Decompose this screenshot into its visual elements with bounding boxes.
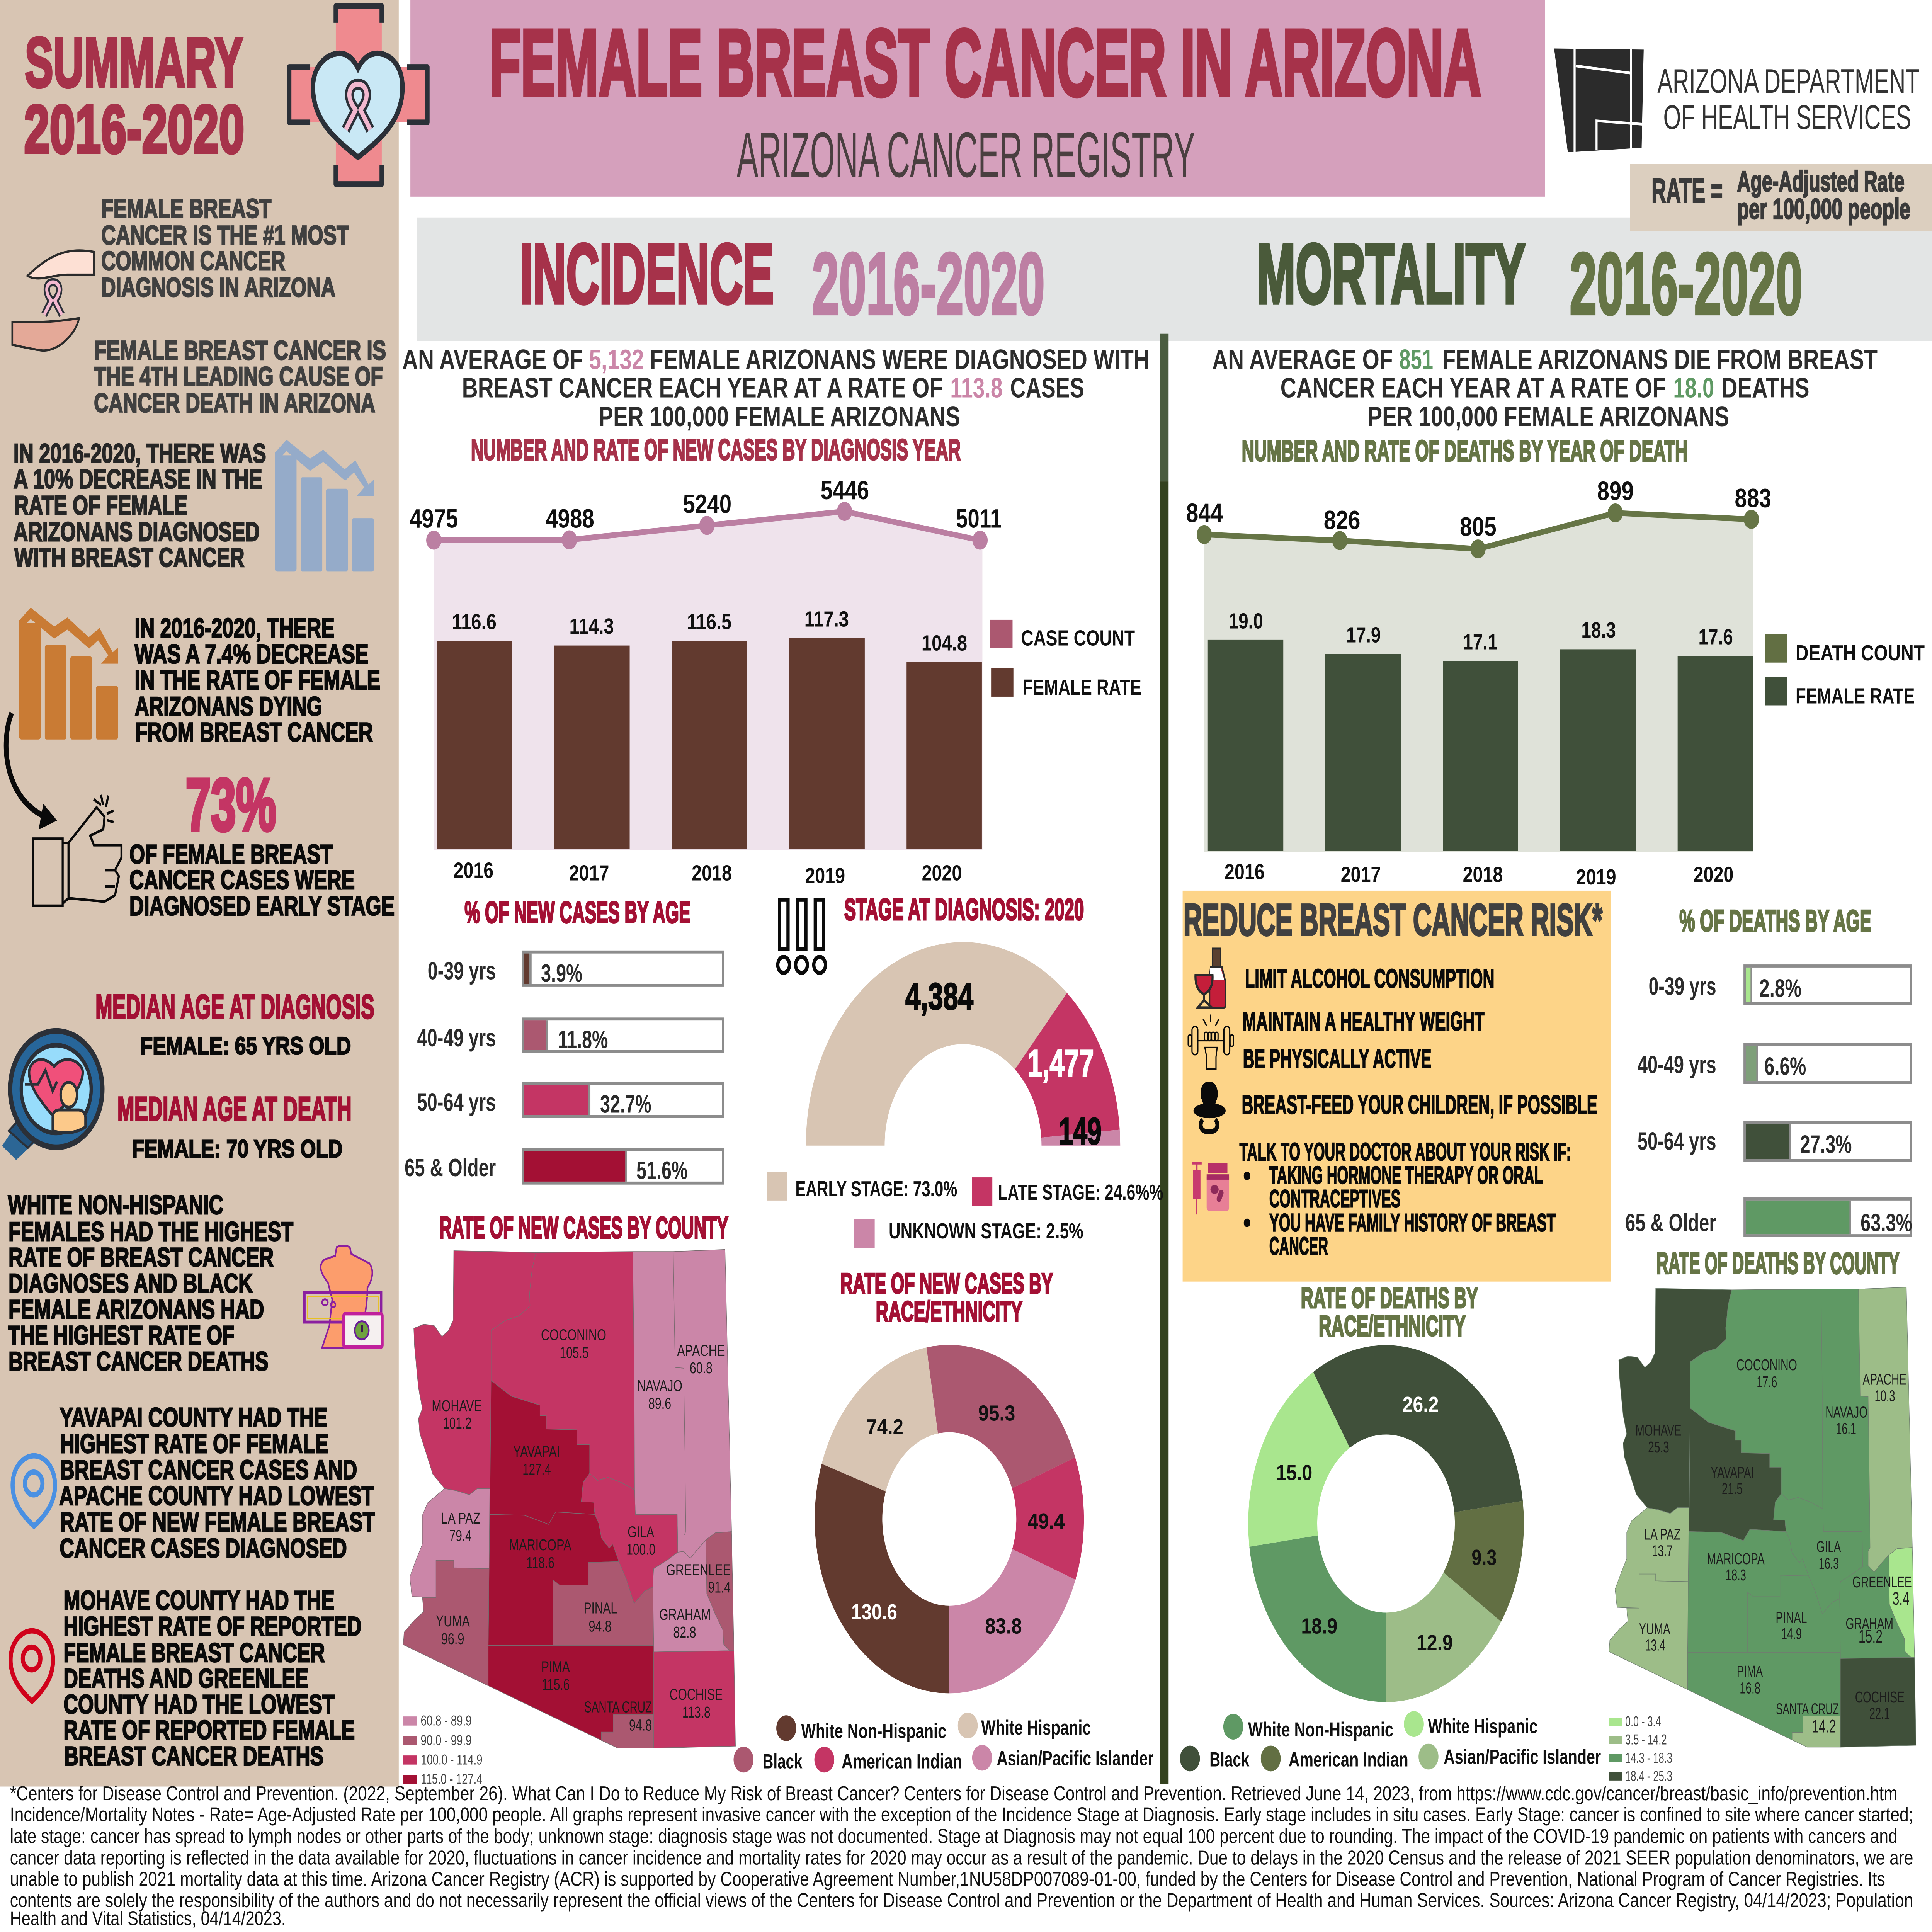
map: rate of deaths by county: GRAHAM	[1846, 1615, 1893, 1633]
text: 10 percent decrease: IN 2016-2020, THERE WAS	[14, 439, 266, 469]
text: most common cancer: DIAGNOSIS IN ARIZONA	[101, 273, 335, 303]
chart: incidence count and rate: 5240	[683, 489, 731, 519]
map: rate of new cases by county: COCONINO	[541, 1326, 606, 1344]
rate definition box: RATE =	[1651, 172, 1723, 211]
logo: Arizona Department of Health Services	[1554, 46, 1919, 155]
map legend: 14.3 - 18.3	[1625, 1750, 1672, 1766]
text: early stage: CANCER CASES WERE	[129, 865, 355, 895]
text: mortality summary: DEATHS	[1722, 372, 1810, 403]
text: mortality summary: 18.0	[1673, 372, 1714, 403]
chart: new cases by race and ethnicity donut: 130.6	[851, 1600, 897, 1624]
icon: blue declining bars	[275, 440, 374, 571]
icon: thumbs up	[33, 795, 121, 906]
chart: new cases by race and ethnicity donut	[733, 1268, 1154, 1773]
legend: incidence chart	[990, 620, 1141, 699]
sidebar title: 2016-2020	[24, 91, 245, 167]
map: rate of deaths by county: SANTA CRUZ	[1776, 1700, 1839, 1718]
map: rate of new cases by county: 100.0	[626, 1541, 655, 1558]
map: rate of deaths by county: COCONINO	[1736, 1356, 1797, 1374]
heading: incidence: INCIDENCE	[520, 226, 774, 321]
text: county incidence finding: CANCER CASES DIAGNOSED	[60, 1534, 347, 1563]
chart: incidence count and rate: 4988	[546, 503, 594, 533]
text: county incidence finding: YAVAPAI COUNTY HAD THE	[60, 1403, 327, 1433]
chart: incidence count and rate: 5446	[820, 475, 869, 505]
map: rate of new cases by county	[403, 1211, 735, 1787]
chart: percent of new cases by age: 50-64 yrs	[417, 1088, 496, 1116]
map: rate of new cases by county: GILA	[628, 1523, 655, 1541]
text: limit alcohol: LIMIT ALCOHOL CONSUMPTION	[1245, 963, 1494, 993]
text: race and ethnicity finding: FEMALES HAD THE HIGHEST	[9, 1217, 293, 1247]
legend: mortality chart: DEATH COUNT	[1796, 640, 1925, 665]
heading: % OF NEW CASES BY AGE	[464, 896, 690, 929]
legend: mortality chart	[1765, 634, 1925, 708]
text: 7.4 percent decrease: FROM BREAST CANCER	[135, 718, 373, 747]
text: 7.4 percent decrease: IN THE RATE OF FEMALE	[134, 665, 380, 695]
legend: Black	[762, 1750, 803, 1773]
text: fourth leading cause: CANCER DEATH IN ARIZONA	[94, 388, 375, 418]
map legend: 3.5 - 14.2	[1625, 1732, 1667, 1748]
text: most common cancer	[101, 194, 349, 303]
map: rate of new cases by county: 82.8	[673, 1623, 696, 1641]
map: rate of new cases by county: 101.2	[443, 1414, 471, 1432]
heading: % OF DEATHS BY AGE	[1679, 904, 1871, 938]
text: race and ethnicity finding: THE HIGHEST RATE OF	[8, 1321, 235, 1350]
chart: mortality count and rate: 2018	[1463, 862, 1503, 887]
map: rate of deaths by county: NAVAJO	[1825, 1403, 1867, 1421]
legend: Asian/Pacific Islander	[1444, 1746, 1601, 1769]
chart: stage at diagnosis half donut	[806, 893, 1120, 1153]
chart: deaths by race and ethnicity donut: 12.9	[1417, 1630, 1453, 1655]
legend	[1180, 1711, 1601, 1771]
map: rate of new cases by county: 105.5	[560, 1344, 588, 1362]
chart: percent of deaths by age: 40-49 yrs	[1638, 1051, 1716, 1079]
map legend: 115.0 - 127.4	[421, 1771, 482, 1787]
chart: deaths by race and ethnicity donut: 15.0	[1276, 1460, 1312, 1485]
map: rate of new cases by county: 113.8	[682, 1703, 711, 1721]
chart: mortality count and rate: 2020	[1694, 862, 1733, 887]
text: early stage: DIAGNOSED EARLY STAGE	[129, 891, 395, 921]
subtitle: ARIZONA CANCER REGISTRY	[737, 119, 1195, 191]
rate definition box	[1630, 164, 1932, 231]
text: healthy weight and active	[1243, 1006, 1485, 1073]
text: breast-feed: BREAST-FEED YOUR CHILDREN, IF POSSIBLE	[1242, 1090, 1597, 1119]
heading	[1301, 1282, 1478, 1342]
text: county incidence finding	[59, 1403, 375, 1563]
text: county mortality finding: MOHAVE COUNTY HAD THE	[63, 1586, 335, 1616]
legend: stage: EARLY STAGE: 73.0%	[795, 1177, 957, 1201]
text: fourth leading cause: FEMALE BREAST CANCER IS	[94, 336, 386, 366]
map: rate of new cases by county: 115.6	[542, 1676, 570, 1693]
icon: blue map pin	[13, 1456, 55, 1526]
text: talk to your doctor	[1240, 1138, 1571, 1260]
heading: incidence years: 2016-2020	[812, 235, 1045, 333]
map: rate of deaths by county: GILA	[1816, 1538, 1841, 1556]
map: rate of new cases by county: YAVAPAI	[513, 1443, 560, 1461]
text: 10 percent decrease	[14, 439, 266, 573]
icon: magnifier with heart and person	[2, 1028, 104, 1160]
map: rate of deaths by county: COCHISE	[1855, 1688, 1905, 1706]
text: talk to your doctor: TALK TO YOUR DOCTOR ABOUT YOUR RISK IF:	[1240, 1138, 1571, 1166]
legend: White Non-Hispanic	[801, 1720, 946, 1743]
text: county mortality finding: HIGHEST RATE OF REPORTED	[63, 1612, 362, 1641]
text: race and ethnicity finding	[8, 1190, 293, 1377]
text: mortality summary: 851	[1399, 344, 1433, 375]
map: rate of new cases by county: NAVAJO	[637, 1377, 682, 1395]
map: rate of new cases by county: 127.4	[522, 1461, 551, 1478]
center divider	[1160, 334, 1168, 1784]
map: rate of deaths by county	[1609, 1247, 1916, 1784]
legend: stage	[767, 1172, 1163, 1248]
chart: new cases by race and ethnicity donut: 49.4	[1028, 1509, 1065, 1533]
header banner	[410, 0, 1545, 197]
chart: percent of deaths by age: 63.3%	[1861, 1209, 1912, 1237]
text: 7.4 percent decrease: ARIZONANS DYING	[134, 692, 322, 722]
legend: incidence chart: CASE COUNT	[1021, 626, 1135, 650]
footer: citations and notes: late stage: cancer has spread to lymph nodes or other parts of the body; unknown stage: diagnosis stage was not documented. Stage at Diagnosis may not equal 100 percent due to rounding. The impact of the COVID-19 pandemic on patients with cancers and	[10, 1825, 1898, 1847]
chart: deaths by race and ethnicity donut: 26.2	[1403, 1392, 1439, 1417]
text: 10 percent decrease: A 10% DECREASE IN THE	[14, 464, 262, 494]
map legend: 100.0 - 114.9	[421, 1752, 482, 1768]
chart: mortality count and rate: 19.0	[1229, 609, 1263, 633]
text: early stage: OF FEMALE BREAST	[129, 840, 333, 869]
map: rate of new cases by county: 60.8	[690, 1359, 713, 1377]
map: rate of deaths by county: 15.2	[1859, 1626, 1883, 1646]
chart: incidence count and rate: 4975	[410, 503, 458, 533]
heading: RACE/ETHNICITY	[876, 1296, 1022, 1328]
icon: hands holding ribbon	[12, 250, 94, 350]
chart: mortality count and rate: 883	[1735, 483, 1771, 513]
map: rate of deaths by county: YUMA	[1639, 1620, 1670, 1638]
text: incidence summary: FEMALE ARIZONANS WERE DIAGNOSED WITH	[650, 344, 1150, 375]
text: median age at diagnosis: MEDIAN AGE AT DIAGNOSIS	[95, 988, 374, 1026]
map: rate of deaths by county: 17.6	[1757, 1373, 1777, 1391]
chart: percent of deaths by age: 50-64 yrs	[1638, 1128, 1716, 1155]
chart: percent of deaths by age	[1625, 904, 1912, 1237]
footer: citations and notes: contents are solely the responsibility of the authors and do not necessarily represent the official views of the Centers for Disease Control and Prevention or the Department of Health and Human Services. Sources: Arizona Cancer Registry, 04/14/2023; Population	[10, 1889, 1913, 1911]
map: rate of new cases by county: PIMA	[541, 1658, 570, 1675]
chart: incidence count and rate: 116.5	[687, 609, 731, 634]
legend: White Non-Hispanic	[1248, 1718, 1393, 1741]
chart: percent of deaths by age: 2.8%	[1759, 975, 1801, 1002]
chart: mortality count and rate: 2017	[1341, 862, 1381, 887]
legend	[733, 1713, 1154, 1773]
chart: percent of deaths by age: 65 & Older	[1625, 1209, 1716, 1237]
text: talk to your doctor: CONTRACEPTIVES	[1269, 1185, 1400, 1213]
text: incidence summary: BREAST CANCER EACH YEAR AT A RATE OF	[462, 372, 943, 403]
text: 10 percent decrease: ARIZONANS DIAGNOSED	[14, 517, 260, 547]
panel: reduce breast cancer risk	[1183, 891, 1611, 1282]
text: county incidence finding: APACHE COUNTY HAD LOWEST	[59, 1481, 374, 1511]
map legend	[1609, 1714, 1672, 1784]
text: mortality summary: CANCER EACH YEAR AT A RATE OF	[1281, 372, 1666, 403]
text: mortality summary	[1212, 344, 1878, 432]
arrow: curved to thumbs up	[6, 713, 57, 830]
chart: mortality count and rate: 2016	[1225, 859, 1265, 884]
map: rate of new cases by county: 96.9	[441, 1630, 464, 1648]
map: rate of new cases by county: MOHAVE	[432, 1397, 482, 1415]
text: incidence summary: PER 100,000 FEMALE ARIZONANS	[599, 401, 960, 432]
logo: Arizona Department of Health Services: ARIZONA DEPARTMENT	[1657, 62, 1919, 100]
text: incidence summary: 113.8	[950, 372, 1003, 403]
text: median age at diagnosis	[95, 988, 374, 1060]
stat: 73 percent: 73%	[185, 764, 276, 846]
text: fourth leading cause	[94, 336, 386, 418]
map: rate of new cases by county: APACHE	[677, 1342, 725, 1359]
legend: stage: UNKNOWN STAGE: 2.5%	[889, 1218, 1083, 1243]
map: rate of deaths by county: 16.1	[1836, 1420, 1856, 1437]
map: rate of new cases by county: 89.6	[648, 1395, 671, 1412]
chart: percent of new cases by age: 3.9%	[541, 960, 582, 988]
text: most common cancer: FEMALE BREAST	[101, 194, 271, 224]
chart: percent of new cases by age: 0-39 yrs	[428, 957, 496, 985]
chart: mortality count and rate: 17.1	[1463, 629, 1498, 654]
chart: incidence count and rate: 2018	[692, 861, 732, 885]
chart: incidence count and rate: 117.3	[804, 607, 849, 631]
chart: percent of deaths by age: 6.6%	[1764, 1053, 1806, 1080]
map legend: 90.0 - 99.9	[421, 1733, 471, 1749]
icon: three exclamation marks	[778, 900, 825, 973]
text: county incidence finding: HIGHEST RATE OF FEMALE	[60, 1429, 328, 1459]
legend: Black	[1209, 1748, 1250, 1771]
heading: RATE OF NEW CASES BY	[840, 1268, 1053, 1300]
chart: stage at diagnosis half donut: 1,477	[1027, 1042, 1094, 1085]
chart: percent of new cases by age	[405, 896, 723, 1185]
sidebar title	[24, 23, 245, 167]
map: rate of deaths by county: 13.4	[1645, 1636, 1665, 1654]
chart: incidence count and rate: 104.8	[922, 631, 967, 655]
section band: incidence and mortality headings	[417, 218, 1932, 341]
chart: new cases by race and ethnicity donut: 74.2	[866, 1414, 903, 1439]
map: rate of deaths by county: APACHE	[1862, 1370, 1906, 1388]
text: most common cancer: COMMON CANCER	[101, 246, 286, 276]
map: rate of deaths by county: 18.3	[1726, 1566, 1746, 1584]
chart: mortality count and rate: 826	[1324, 505, 1360, 535]
map: rate of deaths by county: GREENLEE	[1852, 1573, 1912, 1591]
icon: medical cross with heart ribbon	[287, 3, 429, 187]
heading: STAGE AT DIAGNOSIS: 2020	[844, 893, 1084, 926]
legend: White Hispanic	[1428, 1715, 1538, 1738]
map: rate of new cases by county: GRAHAM	[659, 1605, 711, 1623]
text: county mortality finding: RATE OF REPORTED FEMALE	[63, 1715, 355, 1745]
heading: REDUCE BREAST CANCER RISK*	[1184, 895, 1602, 945]
map: rate of new cases by county: 91.4	[708, 1578, 731, 1596]
map: rate of new cases by county: SANTA CRUZ	[584, 1698, 652, 1716]
text: county mortality finding: BREAST CANCER DEATHS	[64, 1742, 323, 1771]
text: 7.4 percent decrease: WAS A 7.4% DECREASE	[134, 639, 369, 669]
map: rate of deaths by county: 16.3	[1819, 1554, 1839, 1572]
panel: summary sidebar	[0, 0, 429, 1787]
icon: pacifier	[1194, 1082, 1226, 1132]
rate definition box: per 100,000 people	[1737, 193, 1910, 225]
heading: deaths by year: NUMBER AND RATE OF DEATHS BY YEAR OF DEATH	[1242, 435, 1687, 468]
map: rate of new cases by county: GREENLEE	[666, 1561, 731, 1578]
chart: percent of new cases by age: 51.6%	[636, 1157, 688, 1185]
map: rate of new cases by county: MARICOPA	[509, 1536, 571, 1554]
rate definition box: Age-Adjusted Rate	[1737, 165, 1905, 197]
sidebar title: SUMMARY	[25, 23, 243, 102]
chart: percent of new cases by age: 11.8%	[558, 1026, 608, 1054]
chart: incidence count and rate: 2019	[805, 863, 845, 888]
chart: mortality count and rate: 17.9	[1346, 622, 1381, 647]
text: race and ethnicity finding: BREAST CANCER DEATHS	[9, 1347, 269, 1377]
chart: mortality count and rate: 17.6	[1698, 624, 1733, 649]
map: rate of deaths by county: PIMA	[1737, 1662, 1763, 1680]
text: county incidence finding: BREAST CANCER CASES AND	[60, 1455, 357, 1485]
legend: White Hispanic	[981, 1716, 1091, 1740]
heading: RACE/ETHNICITY	[1319, 1310, 1466, 1342]
footer: citations and notes: cancer data reporting is reflected in the data available for 2020, fluctuations in cancer incidence and mortality rates for 2020 may occur as a result of the pandemic. Due to delays in the 2020 Census and the release of 2021 SEER population denominators, we are	[10, 1846, 1913, 1869]
text: race and ethnicity finding: RATE OF BREAST CANCER	[9, 1243, 274, 1272]
chart: incidence count and rate: 2020	[922, 861, 962, 885]
map: rate of deaths by county: YAVAPAI	[1711, 1464, 1754, 1481]
chart: mortality count and rate	[1186, 476, 1771, 889]
text: talk to your doctor: YOU HAVE FAMILY HISTORY OF BREAST	[1269, 1209, 1556, 1237]
chart: mortality count and rate: 2019	[1576, 865, 1616, 889]
heading: new cases by year: NUMBER AND RATE OF NEW CASES BY DIAGNOSIS YEAR	[471, 434, 961, 466]
map: rate of deaths by county: 3.4	[1893, 1588, 1910, 1609]
map: rate of deaths by county: 13.7	[1652, 1542, 1673, 1560]
text: median age at death	[117, 1090, 352, 1163]
text: county mortality finding: DEATHS AND GREENLEE	[63, 1664, 308, 1694]
map: rate of deaths by county: MOHAVE	[1636, 1422, 1682, 1439]
chart: mortality count and rate: 805	[1460, 512, 1497, 541]
legend: incidence chart: FEMALE RATE	[1022, 675, 1141, 699]
text: mortality summary: PER 100,000 FEMALE ARIZONANS	[1367, 401, 1729, 432]
text: county mortality finding: FEMALE BREAST CANCER	[63, 1638, 325, 1668]
chart: deaths by race and ethnicity donut: 18.9	[1301, 1614, 1337, 1638]
map legend: 60.8 - 89.9	[421, 1713, 471, 1729]
text: most common cancer: CANCER IS THE #1 MOST	[101, 221, 349, 250]
text: incidence summary	[402, 344, 1150, 432]
map legend: 0.0 - 3.4	[1625, 1714, 1661, 1730]
chart: mortality count and rate: 844	[1186, 498, 1223, 528]
chart: percent of new cases by age: 32.7%	[600, 1090, 651, 1118]
map: rate of deaths by county: 10.3	[1875, 1387, 1895, 1405]
text: fourth leading cause: THE 4TH LEADING CAUSE OF	[94, 362, 383, 392]
chart: mortality count and rate: 899	[1597, 476, 1634, 506]
text: mortality summary: AN AVERAGE OF	[1212, 344, 1393, 375]
chart: percent of deaths by age: 0-39 yrs	[1649, 973, 1716, 1000]
icon: wine bottle and glass	[1196, 949, 1225, 1008]
text: 7.4 percent decrease: IN 2016-2020, THERE	[134, 613, 335, 643]
chart: incidence count and rate: 2016	[453, 858, 493, 883]
legend: American Indian	[842, 1750, 962, 1773]
chart: incidence count and rate	[410, 475, 1002, 888]
icon: mannequin with breast scan	[304, 1246, 382, 1348]
icon: syringe and pill bottle	[1192, 1163, 1229, 1214]
text: county incidence finding: RATE OF NEW FEMALE BREAST	[60, 1507, 375, 1537]
text: incidence summary: 5,132	[589, 344, 644, 375]
map: rate of deaths by county: 14.9	[1781, 1625, 1802, 1643]
text: race and ethnicity finding: FEMALE ARIZONANS HAD	[9, 1295, 264, 1325]
chart: incidence count and rate: 114.3	[569, 614, 614, 639]
legend: Asian/Pacific Islander	[997, 1747, 1154, 1770]
map legend: 18.4 - 25.3	[1625, 1768, 1672, 1784]
chart: deaths by race and ethnicity donut	[1180, 1282, 1601, 1771]
map: rate of new cases by county: 94.8	[629, 1716, 652, 1734]
map: rate of deaths by county: 21.5	[1722, 1480, 1743, 1498]
map legend	[403, 1713, 482, 1787]
text: median age at diagnosis: FEMALE: 65 YRS OLD	[141, 1032, 351, 1060]
map: rate of new cases by county: YUMA	[436, 1612, 470, 1630]
map: rate of deaths by county: 14.2	[1812, 1716, 1836, 1736]
chart: percent of new cases by age: 40-49 yrs	[417, 1024, 496, 1052]
chart: incidence count and rate: 116.6	[452, 609, 497, 634]
text: healthy weight and active: MAINTAIN A HEALTHY WEIGHT	[1243, 1006, 1485, 1036]
map: rate of new cases by county: PINAL	[584, 1599, 617, 1617]
heading	[840, 1268, 1053, 1328]
chart: incidence count and rate: 2017	[569, 861, 609, 885]
heading: RATE OF DEATHS BY	[1301, 1282, 1478, 1314]
legend: mortality chart: FEMALE RATE	[1796, 684, 1915, 708]
footer: citations and notes: unable to publish 2021 mortality data at this time. Arizona Cancer Registry (ACR) is supported by Cooperative Agreement Number,1NU58DP007089-01-00, funded by the Centers for Disease Control and Prevention, National Program of Cancer Registries. Its	[10, 1867, 1885, 1890]
footer: citations and notes: Incidence/Mortality Notes - Rate= Age-Adjusted Rate per 100,000 people. All graphs represent invasive cancer with the exception of the Incidence Stage at Diagnosis. Early stage includes in situ cases. Early Stage: cancer is confined to site where cancer started;	[10, 1803, 1913, 1826]
map: rate of deaths by county: 25.3	[1648, 1438, 1669, 1456]
text: race and ethnicity finding: DIAGNOSES AND BLACK	[9, 1269, 253, 1299]
chart: mortality count and rate: 18.3	[1581, 618, 1616, 642]
map: rate of deaths by county: LA PAZ	[1644, 1525, 1680, 1543]
text: healthy weight and active: BE PHYSICALLY ACTIVE	[1243, 1044, 1432, 1073]
text: county mortality finding: COUNTY HAD THE LOWEST	[63, 1690, 335, 1719]
text: talk to your doctor: TAKING HORMONE THERAPY OR ORAL	[1269, 1162, 1543, 1189]
map: rate of new cases by county: LA PAZ	[441, 1509, 480, 1527]
chart: stage at diagnosis half donut: 149	[1059, 1110, 1102, 1153]
map: rate of deaths by county: MARICOPA	[1707, 1550, 1765, 1568]
footer: citations and notes: Health and Vital Statistics, 04/14/2023.	[10, 1907, 286, 1930]
map: rate of deaths by county: 16.8	[1740, 1679, 1760, 1697]
text: 10 percent decrease: RATE OF FEMALE	[14, 491, 188, 520]
map: rate of new cases by county: 118.6	[526, 1554, 554, 1571]
map: rate of new cases by county: 79.4	[449, 1527, 471, 1544]
chart: new cases by race and ethnicity donut: 95.3	[978, 1401, 1015, 1425]
text: incidence summary: AN AVERAGE OF	[402, 344, 583, 375]
icon: red map pin	[10, 1631, 53, 1701]
chart: deaths by race and ethnicity donut: 9.3	[1471, 1545, 1497, 1570]
map: rate of deaths by county: 22.1	[1869, 1704, 1890, 1722]
text: 7.4 percent decrease	[134, 613, 380, 747]
map: rate of deaths by county: PINAL	[1776, 1609, 1807, 1626]
chart: incidence count and rate: 5011	[956, 503, 1002, 533]
chart: stage at diagnosis half donut: 4,384	[905, 975, 973, 1018]
footer: citations and notes: *Centers for Disease Control and Prevention. (2022, September 26). What Can I Do to Reduce My Risk of Breast Cancer? Centers for Disease Control and Prevention. Retrieved June 14, 2023, from https://www.cdc.gov/cancer/breast/basic_info/prevention.htm	[10, 1782, 1898, 1804]
chart: new cases by race and ethnicity donut: 83.8	[985, 1614, 1022, 1638]
text: median age at death: FEMALE: 70 YRS OLD	[132, 1135, 342, 1163]
heading: mortality years: 2016-2020	[1570, 235, 1803, 333]
text: incidence summary: CASES	[1010, 372, 1084, 403]
chart: percent of deaths by age: 27.3%	[1800, 1131, 1852, 1158]
main title: FEMALE BREAST CANCER IN ARIZONA	[489, 10, 1481, 116]
icon: dumbbell in hand	[1188, 1014, 1233, 1069]
chart: percent of new cases by age: 65 & Older	[405, 1154, 496, 1182]
text: race and ethnicity finding: WHITE NON-HISPANIC	[8, 1190, 223, 1220]
legend: American Indian	[1289, 1748, 1408, 1771]
legend: stage: LATE STAGE: 24.6%%	[998, 1180, 1163, 1204]
footer: citations and notes	[10, 1782, 1913, 1930]
heading: mortality: MORTALITY	[1257, 226, 1526, 321]
heading: RATE OF NEW CASES BY COUNTY	[439, 1211, 728, 1245]
text: talk to your doctor: CANCER	[1269, 1233, 1328, 1260]
icon: orange declining bars	[19, 608, 118, 740]
text: median age at death: MEDIAN AGE AT DEATH	[117, 1090, 352, 1128]
text: 10 percent decrease: WITH BREAST CANCER	[14, 543, 245, 573]
text: early stage	[129, 840, 395, 921]
map: rate of new cases by county: COCHISE	[670, 1685, 723, 1703]
text: county mortality finding	[63, 1586, 362, 1771]
text: mortality summary: FEMALE ARIZONANS DIE FROM BREAST	[1442, 344, 1878, 375]
map: rate of new cases by county: 94.8	[588, 1617, 612, 1635]
logo: Arizona Department of Health Services: OF HEALTH SERVICES	[1663, 98, 1911, 136]
